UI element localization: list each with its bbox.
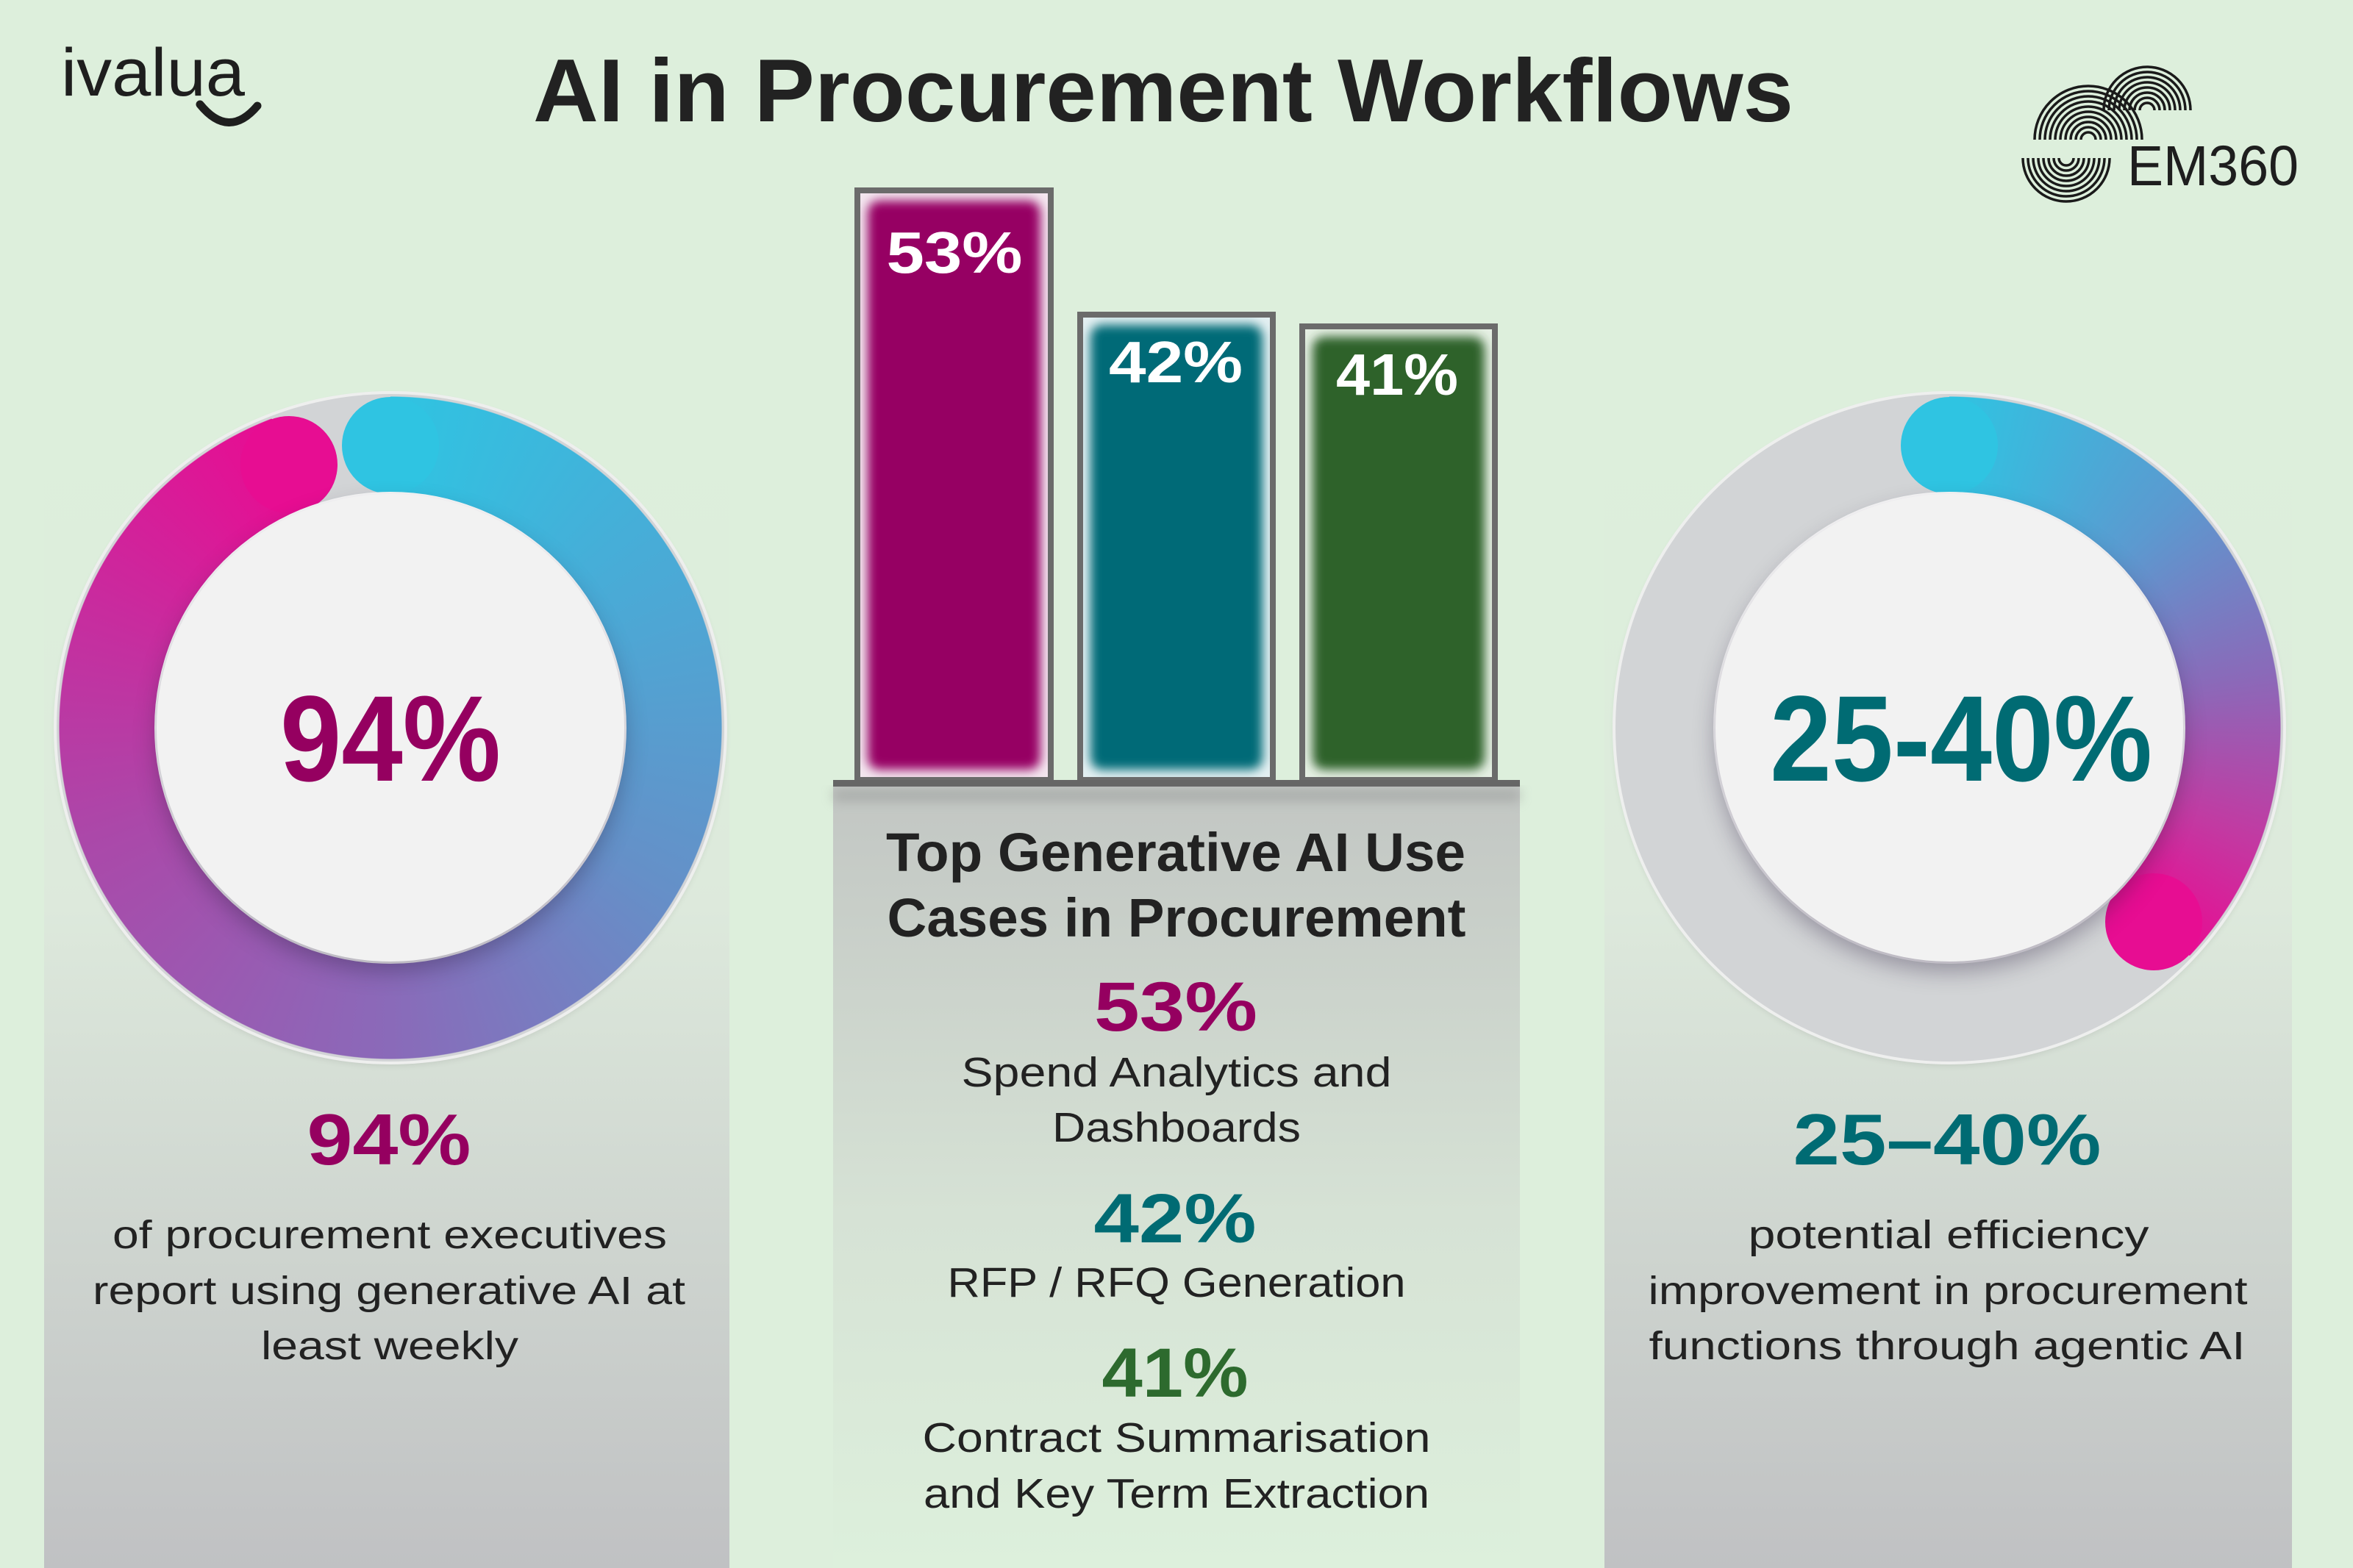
bar labels: 42% — [1109, 329, 1243, 395]
right stat text: functions through agentic AI — [1649, 1324, 2246, 1368]
bar chart: use case percentages — [833, 190, 1520, 801]
bar: 42% RFP/RFQ — [1080, 315, 1273, 780]
bar: 41% contract — [1302, 326, 1495, 780]
center heading: Top Generative AI Use — [886, 822, 1465, 883]
title: AI in Procurement Workflows — [533, 40, 1793, 140]
left stat text — [93, 1099, 685, 1368]
left stat text: of procurement executives — [113, 1213, 667, 1257]
panel: right stat background — [1604, 368, 2292, 1568]
right stat text: potential efficiency — [1749, 1213, 2149, 1257]
use case: 42%: RFP / RFQ Generation — [947, 1259, 1406, 1306]
logo: EM360 — [2023, 67, 2299, 201]
use case: 53% — [962, 968, 1391, 1151]
use case: 53%: Dashboards — [1052, 1104, 1301, 1151]
donut label: 94%: 94% — [280, 671, 501, 807]
use case: 41%: Contract Summarisation — [922, 1414, 1431, 1461]
use case: 41% — [922, 1334, 1431, 1517]
left stat text: 94% — [307, 1099, 471, 1180]
bar labels: 53% — [887, 220, 1022, 285]
donut label: 25-40%: 25-40% — [1770, 671, 2152, 807]
use case: 53%: Spend Analytics and — [962, 1049, 1391, 1096]
use case: 41%: and Key Term Extraction — [924, 1470, 1429, 1517]
left stat text: report using generative AI at — [93, 1269, 685, 1313]
right stat text — [1649, 1099, 2247, 1368]
bar labels: 41% — [1336, 342, 1458, 407]
use case: 42% — [947, 1180, 1406, 1306]
use case: 42%: 42% — [1094, 1180, 1256, 1258]
right stat text: 25–40% — [1793, 1099, 2102, 1180]
left stat text: least weekly — [261, 1324, 518, 1368]
logo: EM360: EM360 — [2127, 135, 2299, 198]
logo: ivalua: ivalua — [61, 35, 246, 110]
center heading — [886, 822, 1466, 948]
panel: center use cases background — [833, 784, 1520, 1568]
use case: 53%: 53% — [1094, 968, 1257, 1046]
right stat text: improvement in procurement — [1649, 1269, 2247, 1313]
use case: 41%: 41% — [1101, 1334, 1249, 1412]
bar labels — [887, 220, 1458, 407]
panel: left stat background — [44, 368, 729, 1568]
center heading: Cases in Procurement — [887, 887, 1466, 948]
donut: left 94% — [54, 391, 727, 1066]
bar: 53% spend analytics — [857, 190, 1051, 780]
donut: right 25-40% — [1613, 391, 2286, 1066]
